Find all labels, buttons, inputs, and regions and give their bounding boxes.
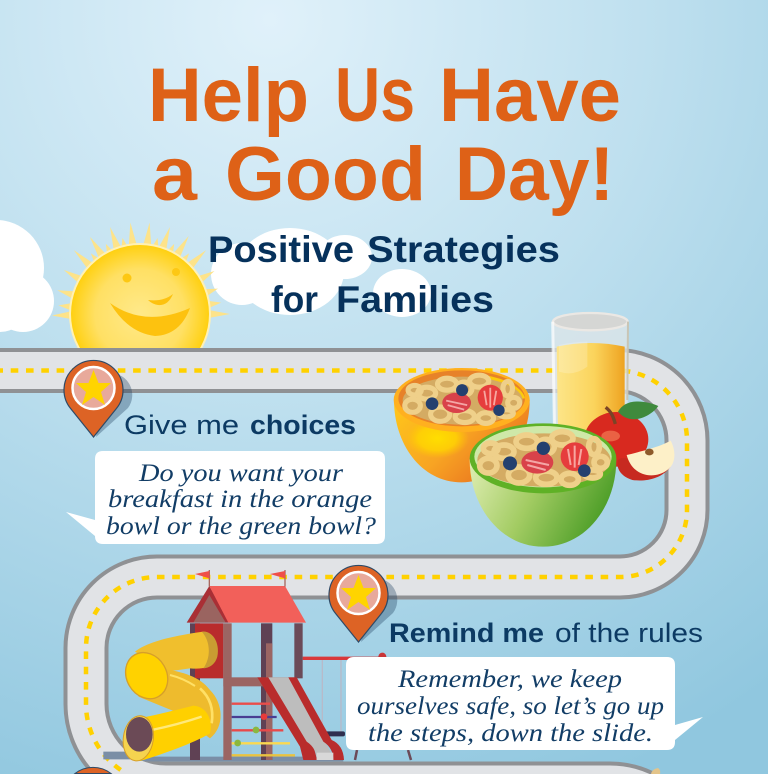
breakfast illustration (394, 313, 674, 547)
ground shadow (103, 752, 343, 761)
pin: rules (329, 565, 397, 642)
subtitle: for (271, 279, 318, 320)
speech bubble: choices: bowl or the green bowl? (106, 513, 377, 540)
title: Us (335, 53, 415, 138)
heading: give me choices (124, 410, 356, 440)
title: Have (439, 53, 621, 138)
title (148, 53, 621, 217)
pin: next step (cropped) (75, 767, 111, 774)
roof (187, 570, 306, 623)
swing set (303, 653, 386, 736)
speech bubble: choices: Do you want your (138, 460, 343, 487)
heading: remind me of the rules: Remind me (389, 618, 544, 648)
speech bubble: choices: breakfast in the orange (108, 486, 372, 513)
heading: remind me of the rules (389, 618, 703, 648)
title: a (152, 132, 198, 217)
heading: give me choices: Give me (124, 410, 239, 440)
icon: green bowl (470, 423, 616, 547)
speech bubble: choices (66, 451, 385, 544)
pin: choices (64, 360, 132, 437)
icon: orange bowl (394, 368, 530, 482)
subtitle: Strategies (367, 229, 560, 270)
cloud: left (0, 220, 54, 332)
icon: juice glass (552, 313, 628, 440)
speech bubble: rules: the steps, down the slide. (368, 720, 653, 747)
icon: apple (584, 402, 674, 481)
swing legs (355, 750, 411, 760)
cloud: behind subtitle (211, 228, 431, 317)
sun (52, 222, 230, 385)
subtitle: Positive (208, 229, 354, 270)
heading: remind me of the rules: of the rules (555, 618, 703, 648)
playground (103, 570, 386, 763)
subtitle: Families (336, 279, 494, 320)
sun rays (52, 222, 230, 320)
speech bubble: rules (346, 657, 703, 750)
heading: give me choices: choices (250, 410, 356, 440)
yellow tube slide (117, 632, 221, 763)
play tower (190, 623, 303, 760)
title: Day! (455, 132, 614, 217)
speech bubble: rules: ourselves safe, so let’s go up (357, 693, 664, 720)
subtitle (208, 229, 560, 320)
title: Help (148, 53, 309, 138)
title: Good (225, 132, 426, 217)
speech bubble: rules: Remember, we keep (397, 666, 622, 693)
red slide (257, 677, 344, 760)
road (0, 370, 687, 774)
tan object at bottom edge (651, 768, 660, 774)
